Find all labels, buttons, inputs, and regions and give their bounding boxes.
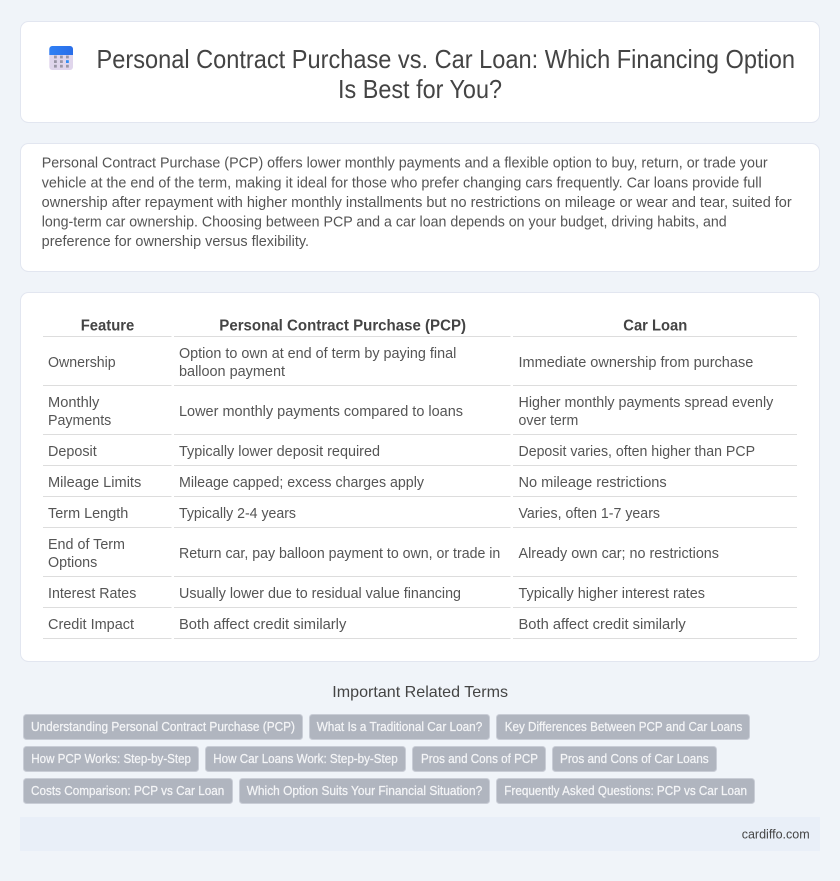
panel: summary paragraph: ownership after repayment with higher monthly installments but no restrictions on mileage or wear and tear, suited for xyxy=(42,195,792,211)
row: end of term options: End of Term xyxy=(48,537,125,553)
row: deposit: Deposit varies, often higher than PCP xyxy=(518,444,755,460)
table header: Personal Contract Purchase (PCP) xyxy=(219,318,466,335)
title xyxy=(96,46,795,104)
row: end of term options xyxy=(48,537,719,571)
row: mileage limits: Mileage Limits xyxy=(48,475,141,491)
tag: How PCP Works: Step-by-Step xyxy=(31,751,191,766)
row: credit impact: Both affect credit similarly xyxy=(518,617,687,633)
row: mileage limits: No mileage restrictions xyxy=(518,475,667,491)
tag xyxy=(24,778,232,804)
panel: comparison table xyxy=(20,292,820,662)
tag xyxy=(240,778,490,804)
tag: Key Differences Between PCP and Car Loans xyxy=(505,719,742,734)
footer: cardiffo.com xyxy=(742,826,810,841)
row: credit impact xyxy=(48,617,687,633)
row: monthly payments: Higher monthly payments spread evenly xyxy=(518,395,774,411)
tag: Understanding Personal Contract Purchase (PCP) xyxy=(31,719,295,734)
row: monthly payments: Monthly xyxy=(48,395,100,411)
title: Is Best for You? xyxy=(338,76,502,104)
row: ownership: balloon payment xyxy=(179,364,285,380)
row: deposit: Deposit xyxy=(48,444,97,460)
tag: How Car Loans Work: Step-by-Step xyxy=(213,751,398,766)
table header: Car Loan xyxy=(623,318,687,335)
tag: Which Option Suits Your Financial Situation? xyxy=(247,783,482,798)
row: ownership: Ownership xyxy=(48,355,116,371)
tag xyxy=(496,714,750,740)
icon: calendar xyxy=(49,46,73,70)
row: credit impact: Credit Impact xyxy=(48,617,134,633)
row: ownership: Option to own at end of term by paying final xyxy=(179,346,456,362)
panel: summary paragraph: long-term car ownership. Choosing between PCP and a car loan depends on your budget, driving habits, and xyxy=(42,214,727,230)
row: monthly payments: Lower monthly payments compared to loans xyxy=(179,404,463,420)
tag xyxy=(412,746,546,772)
tag: Frequently Asked Questions: PCP vs Car Loan xyxy=(504,783,747,798)
panel: summary paragraph: preference for ownership versus flexibility. xyxy=(42,234,309,250)
row: interest rates: Typically higher interest rates xyxy=(518,586,705,602)
row: interest rates: Interest Rates xyxy=(48,586,136,602)
row: term length: Typically 2-4 years xyxy=(179,506,296,522)
tag xyxy=(206,746,406,772)
panel: related term tags xyxy=(24,714,754,804)
row: mileage limits: Mileage capped; excess charges apply xyxy=(179,475,425,491)
panel: title card xyxy=(20,22,820,122)
row: deposit: Typically lower deposit required xyxy=(179,444,380,460)
row: interest rates: Usually lower due to residual value financing xyxy=(179,586,461,602)
tag xyxy=(24,746,198,772)
row: monthly payments: over term xyxy=(518,413,578,429)
row: ownership: Immediate ownership from purchase xyxy=(518,355,753,371)
row: term length: Varies, often 1-7 years xyxy=(518,506,660,522)
heading: important related terms: Important Related Terms xyxy=(332,684,508,701)
row: mileage limits xyxy=(48,475,667,491)
tag: Pros and Cons of Car Loans xyxy=(560,751,709,766)
row: term length xyxy=(48,506,660,522)
panel: summary paragraph: vehicle at the end of the term, making it ideal for those who prefer changing cars frequently. Car loans provide full xyxy=(42,175,762,191)
tag xyxy=(24,714,302,740)
tag xyxy=(552,746,716,772)
panel: summary paragraph: Personal Contract Purchase (PCP) offers lower monthly payments and a flexible option to buy, return, or trade your xyxy=(42,156,768,172)
row: interest rates xyxy=(48,586,705,602)
row: term length: Term Length xyxy=(48,506,128,522)
row: end of term options: Return car, pay balloon payment to own, or trade in xyxy=(179,546,500,562)
tag: Pros and Cons of PCP xyxy=(421,751,538,766)
row: credit impact: Both affect credit similarly xyxy=(179,617,347,633)
title: Personal Contract Purchase vs. Car Loan: Which Financing Option xyxy=(96,46,795,74)
row: end of term options: Already own car; no restrictions xyxy=(518,546,719,562)
table header xyxy=(81,318,687,335)
panel: summary paragraph xyxy=(20,144,820,272)
row: end of term options: Options xyxy=(48,555,97,571)
tag: Costs Comparison: PCP vs Car Loan xyxy=(31,783,224,798)
row: monthly payments xyxy=(48,395,774,429)
tag xyxy=(310,714,490,740)
row: deposit xyxy=(48,444,755,460)
footer xyxy=(20,817,820,851)
tag xyxy=(496,778,754,804)
row: monthly payments: Payments xyxy=(48,413,111,429)
row: ownership xyxy=(48,346,753,380)
table header: Feature xyxy=(81,318,135,335)
tag: What Is a Traditional Car Loan? xyxy=(317,719,482,734)
